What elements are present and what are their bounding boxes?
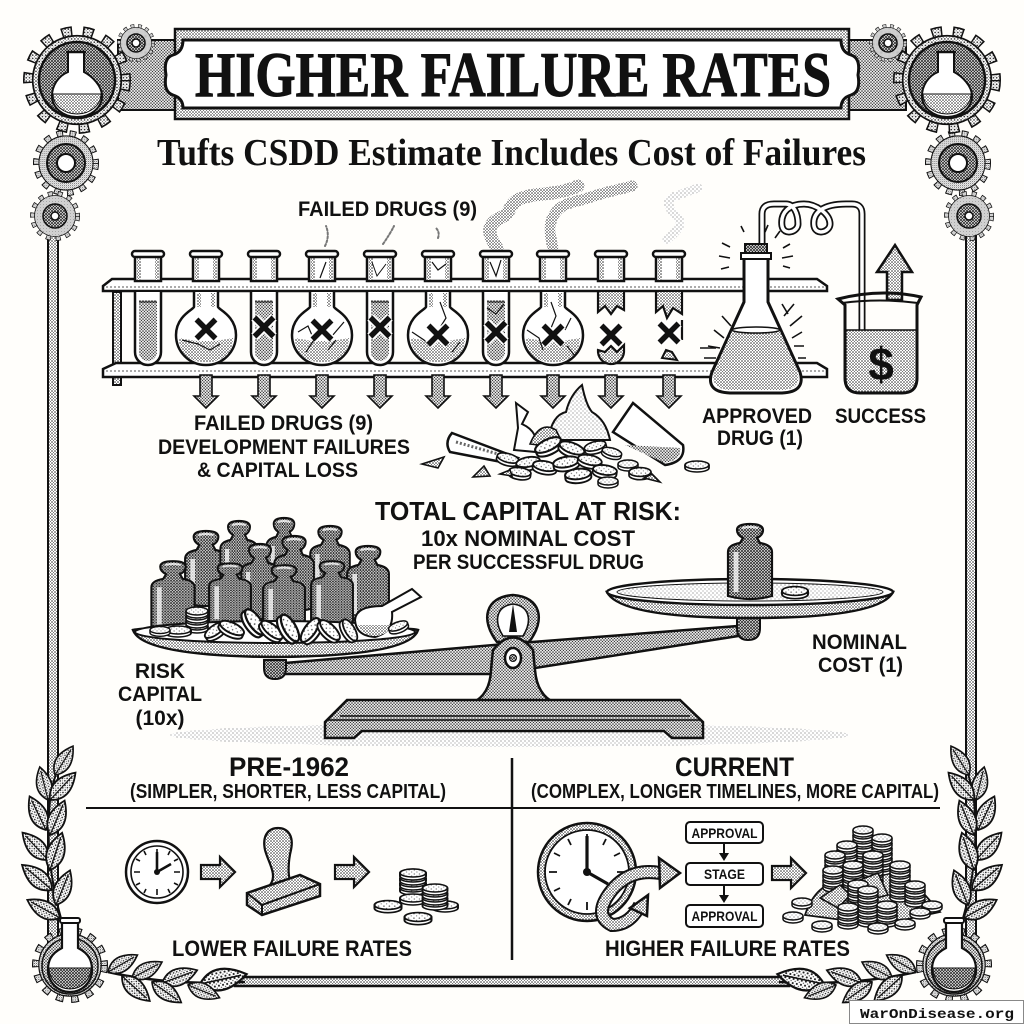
right pan with weight bbox=[607, 524, 893, 618]
heading: total capital at risk: 10x NOMINAL COST bbox=[421, 526, 636, 551]
comparison dividers bbox=[86, 758, 940, 960]
label: approved drug: DRUG (1) bbox=[717, 427, 803, 450]
gears: top-left cluster bbox=[29, 26, 153, 238]
left pan with weights and coins bbox=[133, 518, 421, 657]
arrow bbox=[335, 857, 369, 887]
attribution badge: WarOnDisease.org bbox=[860, 1007, 1014, 1023]
heading: current: (COMPLEX, LONGER TIMELINES, MORE CAPITAL) bbox=[531, 781, 939, 803]
smoke wisps bbox=[325, 186, 698, 248]
heading: total capital at risk: PER SUCCESSFUL DRUG bbox=[413, 551, 644, 574]
vessel 3: tube failed bbox=[248, 251, 280, 365]
arrow bbox=[201, 857, 235, 887]
failed drug arrows bbox=[194, 375, 681, 408]
icon: small clock bbox=[126, 841, 188, 903]
attribution badge bbox=[850, 1000, 1024, 1024]
success beaker with dollar and arrow bbox=[838, 245, 921, 393]
box: stage: STAGE bbox=[704, 866, 745, 882]
subtitle: Tufts CSDD Estimate Includes Cost of Failures bbox=[157, 132, 866, 174]
label: higher failure rates: HIGHER FAILURE RATES bbox=[605, 936, 850, 961]
approval flow bbox=[686, 822, 763, 927]
icon: small coin stacks bbox=[374, 869, 458, 925]
broken vessels and coins pile bbox=[422, 385, 709, 488]
vessel 5: tube failed bbox=[364, 251, 396, 365]
label: risk capital: CAPITAL bbox=[118, 683, 202, 706]
vessel 8: flask failed bbox=[523, 251, 583, 365]
vessel 4: flask failed bbox=[292, 251, 352, 365]
vessel 2: flask failed bbox=[176, 251, 236, 365]
heading: current bbox=[531, 752, 939, 803]
label: failed drugs development failures bbox=[158, 412, 410, 482]
label: approved drug: APPROVED bbox=[702, 405, 812, 428]
laurel and flask gear: bottom-left corner bbox=[16, 742, 249, 1009]
box: approval bottom: APPROVAL bbox=[692, 908, 758, 924]
approved drug flask with tube bbox=[700, 204, 862, 393]
vessel 9: shattered tube bbox=[595, 251, 627, 364]
test tube rack bbox=[103, 279, 827, 385]
heading: pre-1962 bbox=[130, 752, 446, 803]
vessel 7: tube failed bbox=[480, 251, 512, 365]
title plaque: HIGHER FAILURE RATES bbox=[195, 40, 831, 110]
label: failed drugs development failures: DEVELOPMENT FAILURES bbox=[158, 436, 410, 459]
laurel and flask gear: bottom-right corner bbox=[775, 742, 1008, 1009]
label: success: SUCCESS bbox=[835, 405, 926, 428]
arrow bbox=[772, 858, 806, 888]
vessel 10: shattered tube bbox=[653, 251, 685, 360]
label: approved drug bbox=[702, 405, 812, 450]
label: nominal cost: COST (1) bbox=[818, 654, 903, 677]
vessel 6: flask failed bbox=[408, 251, 468, 365]
vessel 1: intact tube bbox=[132, 251, 164, 365]
label: failed drugs development failures: & CAPITAL LOSS bbox=[197, 459, 358, 482]
label: nominal cost: NOMINAL bbox=[812, 631, 907, 654]
label: failed drugs development failures: FAILED DRUGS (9) bbox=[194, 412, 373, 435]
label: nominal cost bbox=[812, 631, 907, 677]
icon: large clock with looping arrow bbox=[538, 823, 680, 925]
heading: pre-1962: PRE-1962 bbox=[229, 752, 349, 782]
heading: pre-1962: (SIMPLER, SHORTER, LESS CAPITAL) bbox=[130, 781, 446, 803]
label: risk capital: (10x) bbox=[135, 707, 185, 730]
balance scale bbox=[264, 595, 760, 738]
title plaque bbox=[118, 29, 906, 119]
heading: current: CURRENT bbox=[675, 752, 794, 782]
heading: total capital at risk: TOTAL CAPITAL AT RISK: bbox=[375, 496, 681, 526]
label: failed drugs top: FAILED DRUGS (9) bbox=[298, 198, 477, 221]
label: lower failure rates: LOWER FAILURE RATES bbox=[172, 936, 412, 961]
gears: top-right cluster bbox=[871, 26, 995, 238]
ornate frame bbox=[48, 225, 976, 986]
icon: large coin pile bbox=[783, 826, 942, 934]
icon: approval stamp bbox=[247, 828, 320, 915]
success beaker with dollar and arrow: $ bbox=[868, 338, 894, 390]
balance scale shadow bbox=[170, 723, 850, 747]
box: approval top: APPROVAL bbox=[692, 825, 758, 841]
label: risk capital: RISK bbox=[135, 660, 185, 683]
heading: total capital at risk bbox=[375, 496, 681, 574]
label: risk capital bbox=[118, 660, 202, 730]
